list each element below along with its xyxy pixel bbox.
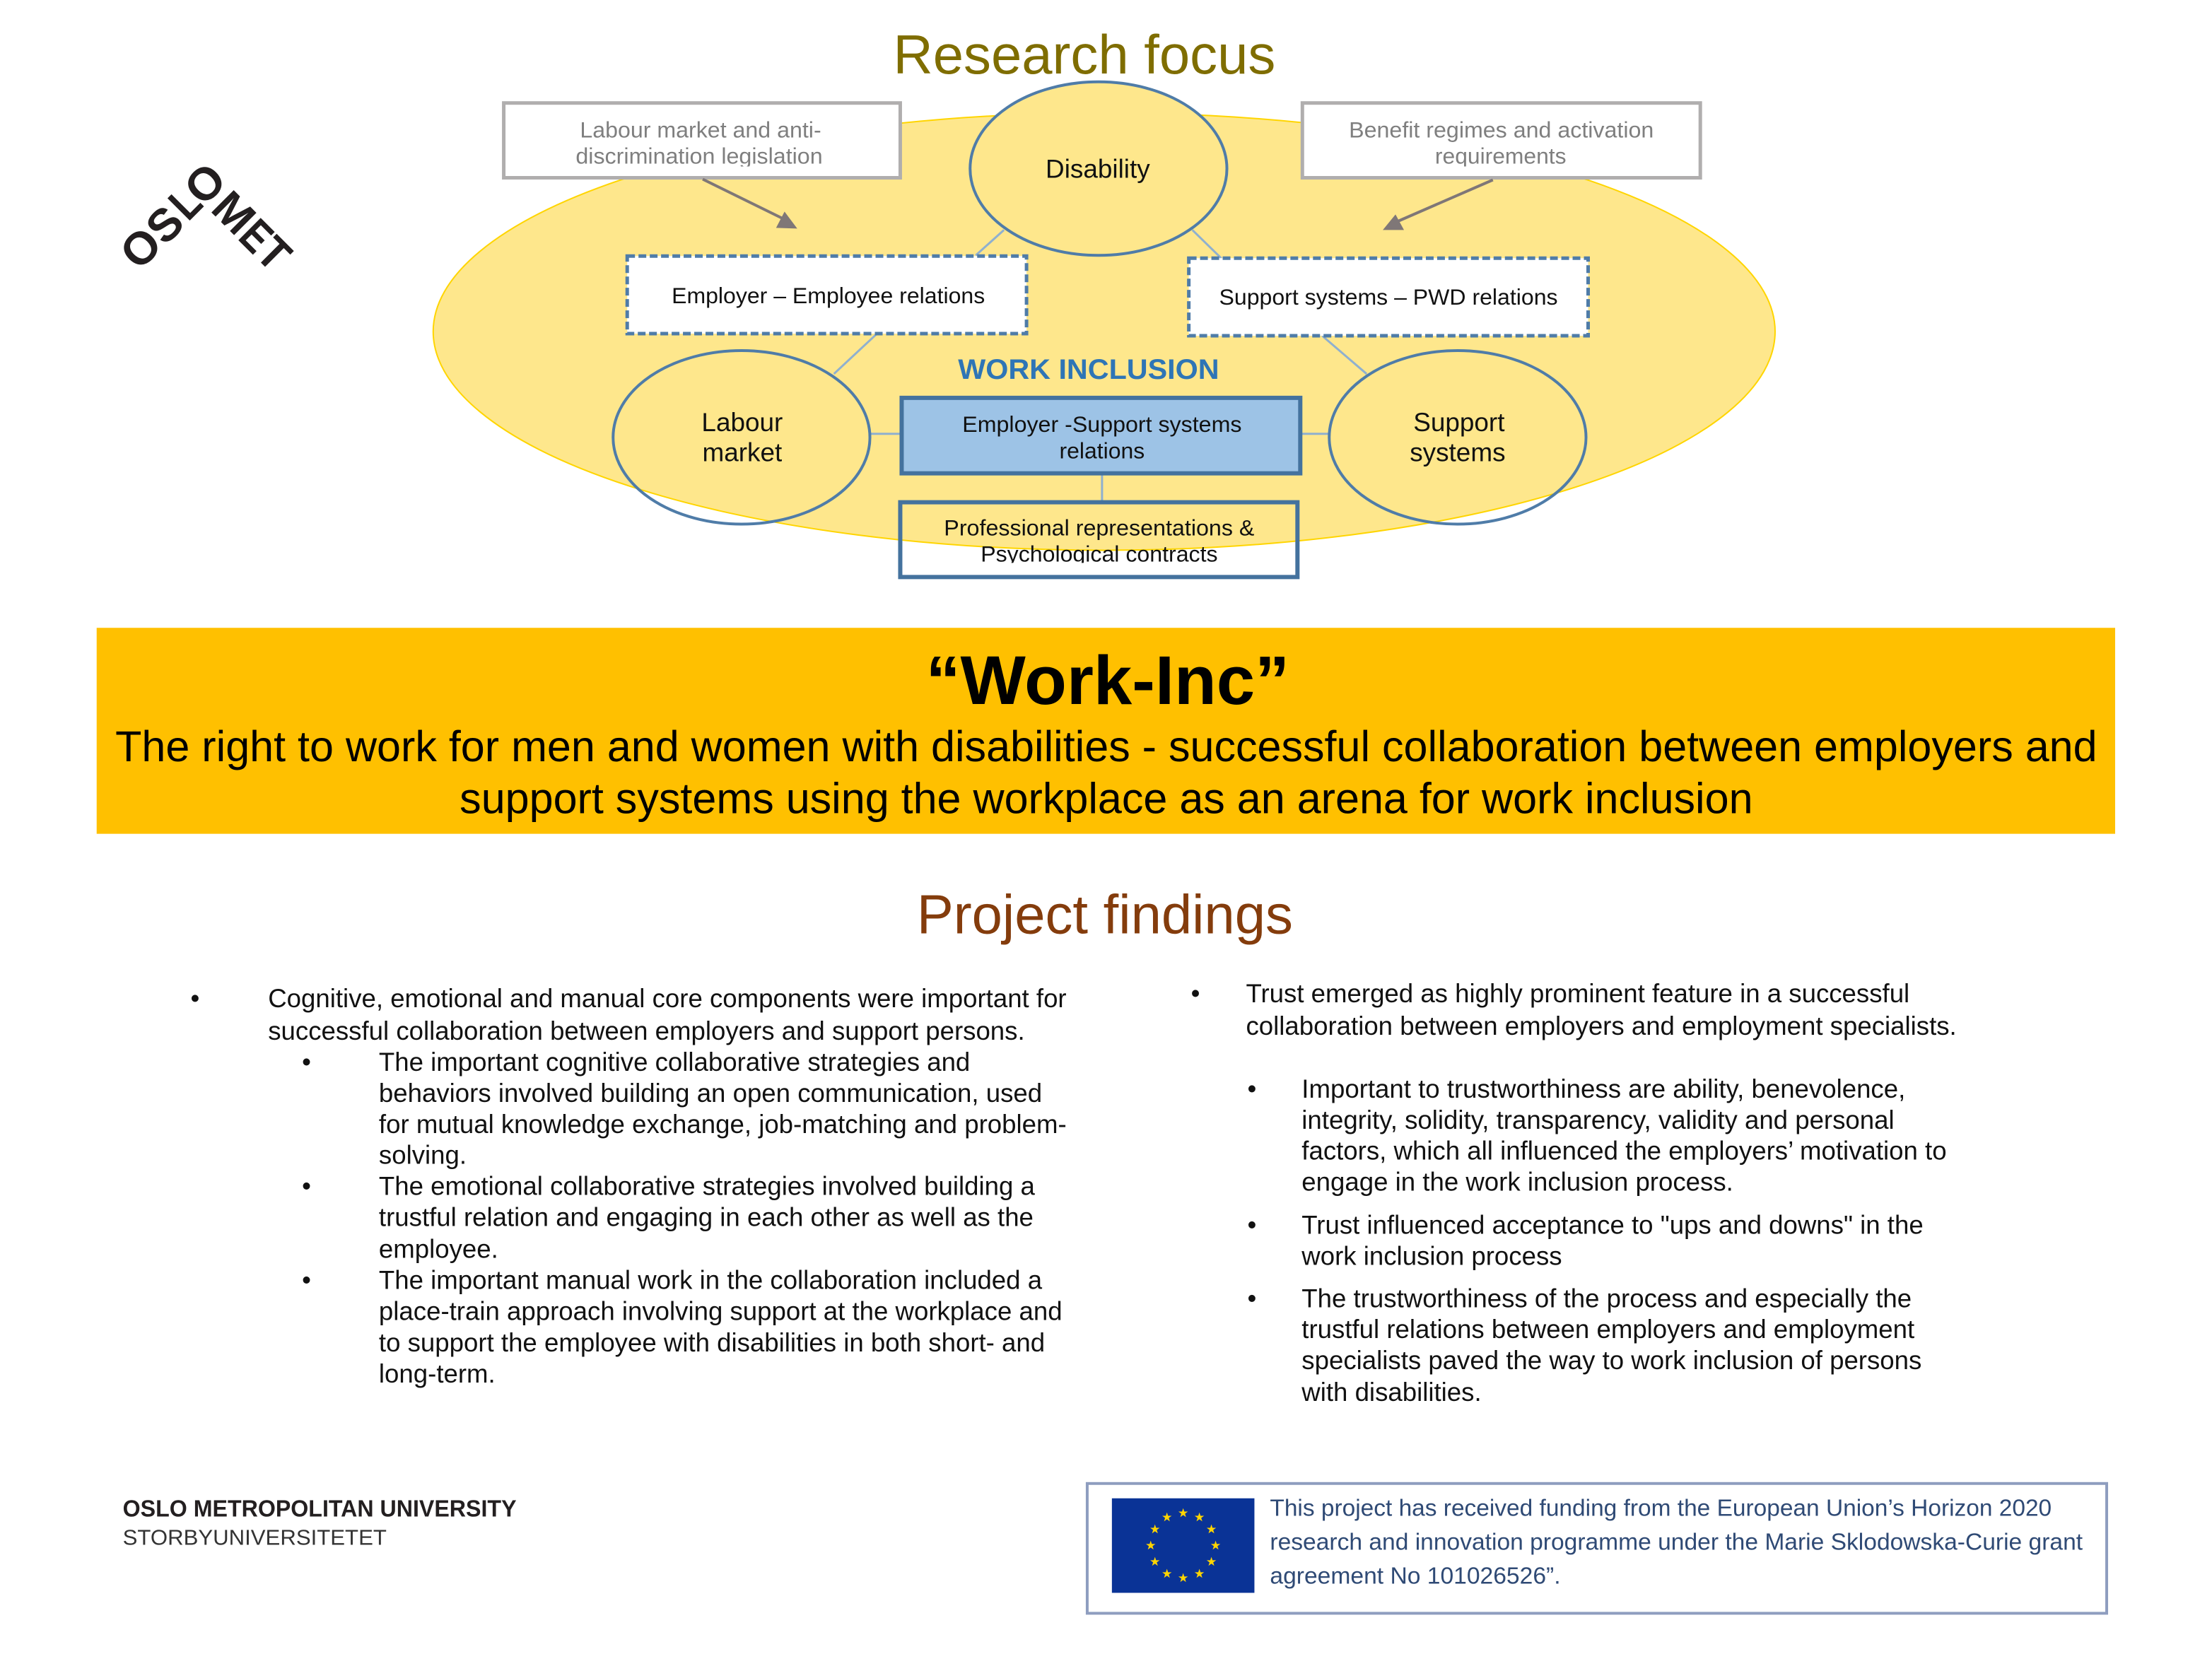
banner subtitle: support systems using the workplace as an arena for work inclusion [460, 775, 1753, 823]
text column: left findings: • [302, 1172, 311, 1201]
label: WORK INCLUSION: WORK INCLUSION [958, 354, 1219, 385]
text column: left findings [190, 984, 1067, 1388]
banner subtitle: The right to work for men and women with disabilities - successful collaboration between employers and [115, 722, 2097, 770]
text column: left findings: place-train approach involving support at the workplace and [379, 1296, 1063, 1325]
text column: left findings: The important manual work in the collaboration included a [379, 1265, 1043, 1294]
box: employer-support systems relations: Employer -Support systems [962, 411, 1241, 437]
text column: left findings: • [190, 984, 199, 1013]
text column: right findings: Trust emerged as highly prominent feature in a successful [1246, 979, 1909, 1008]
logo: OSLOMET: T [247, 227, 301, 281]
text column: right findings: factors, which all influenced the employers’ motivation to [1301, 1137, 1947, 1166]
box: professional representations: Professional representations & [944, 515, 1254, 540]
box: benefit regimes: requirements [1435, 143, 1567, 169]
text column: left findings: trustful relation and engaging in each other as well as the [379, 1203, 1034, 1232]
text column: left findings: solving. [379, 1141, 467, 1170]
box: employer-support systems relations: relations [1060, 438, 1145, 464]
text column: left findings: The important cognitive collaborative strategies and [379, 1048, 970, 1077]
circle: Support systems [1329, 351, 1586, 524]
text column: right findings: collaboration between employers and employment specialists. [1246, 1011, 1957, 1040]
circle: Disability: Disability [1046, 154, 1150, 183]
box: employer-employee relations: Employer – Employee relations [672, 283, 985, 308]
logo: OSLOMET: M [202, 181, 266, 245]
box: support systems-PWD relations [1189, 258, 1588, 336]
logo: OSLOMET [110, 153, 301, 281]
box: labour market legislation: discrimination legislation [575, 143, 823, 169]
circle: Labour market: market [702, 438, 782, 467]
logo: OSLOMET: L [159, 177, 212, 229]
banner subtitle [115, 722, 2097, 823]
logo: OSLOMET: O [110, 217, 172, 278]
box: labour market legislation: Labour market and anti- [580, 117, 821, 143]
circle: Disability [970, 82, 1227, 255]
background ellipse [433, 113, 1775, 550]
text column: left findings: employee. [379, 1234, 498, 1263]
text column: right findings: work inclusion process [1301, 1241, 1562, 1270]
text column: right findings: • [1247, 1074, 1256, 1103]
circle: Labour market: Labour [701, 408, 783, 437]
arrow: labour legislation to employer relations [703, 179, 797, 228]
box: support systems-PWD relations: Support systems – PWD relations [1219, 284, 1558, 310]
box: employer-employee relations [627, 256, 1026, 334]
text column: right findings: trustful relations between employers and employment [1301, 1315, 1914, 1344]
text column: left findings: • [302, 1265, 311, 1294]
logo: OSLOMET: O [174, 153, 235, 214]
text column: left findings: behaviors involved building an open communication, used [379, 1079, 1042, 1108]
text column: right findings: engage in the work inclusion process. [1301, 1168, 1733, 1197]
logo: OSLOMET: S [136, 196, 194, 254]
box: labour market legislation [504, 103, 900, 177]
text column: right findings: The trustworthiness of the process and especially the [1301, 1284, 1912, 1313]
text column: right findings: integrity, solidity, transparency, validity and personal [1301, 1105, 1895, 1134]
text column: right findings: • [1191, 979, 1200, 1008]
icon: EU flag [1112, 1498, 1254, 1592]
banner: Work-Inc title [97, 628, 2115, 834]
text column: left findings: for mutual knowledge exchange, job-matching and problem- [379, 1110, 1067, 1139]
funding text: agreement No 101026526”. [1270, 1563, 1561, 1589]
box: benefit regimes: Benefit regimes and activation [1349, 117, 1654, 143]
text column: right findings: • [1247, 1211, 1256, 1240]
box: benefit regimes [1302, 103, 1700, 177]
heading: Project findings: Project findings [917, 884, 1293, 945]
text column: left findings: The emotional collaborative strategies involved building a [379, 1172, 1036, 1201]
heading: Research focus: Research focus [894, 25, 1275, 86]
text column: right findings: specialists paved the way to work inclusion of persons [1301, 1346, 1921, 1375]
funding text: research and innovation programme under the Marie Sklodowska-Curie grant [1270, 1529, 2083, 1555]
text column: left findings: to support the employee with disabilities in both short- and [379, 1328, 1045, 1357]
text column: right findings: with disabilities. [1301, 1378, 1482, 1407]
banner title: “Work-Inc” [926, 641, 1289, 719]
box: professional representations: Psychological contracts [981, 541, 1218, 566]
box: professional representations [900, 503, 1297, 577]
text column: right findings: Important to trustworthiness are ability, benevolence, [1301, 1074, 1905, 1103]
funding text: This project has received funding from the European Union’s Horizon 2020 [1270, 1495, 2052, 1521]
text column: right findings [1191, 979, 1957, 1407]
circle: Labour market [613, 351, 870, 524]
text column: left findings: Cognitive, emotional and manual core components were important for [268, 984, 1067, 1013]
text column: left findings: • [302, 1048, 311, 1077]
connector lines [834, 230, 1367, 501]
text column: left findings: successful collaboration between employers and support persons. [268, 1016, 1025, 1045]
footer: university name: STORBYUNIVERSITETET [123, 1525, 387, 1550]
footer: university name [123, 1496, 517, 1550]
box: employer-support systems relations [901, 398, 1300, 474]
logo: OSLOMET: E [230, 210, 283, 263]
text column: left findings: long-term. [379, 1359, 496, 1388]
text column: right findings: • [1247, 1284, 1256, 1313]
circle: Support systems: systems [1410, 438, 1506, 467]
funding panel: EU Horizon 2020 [1087, 1484, 2107, 1613]
footer: university name: OSLO METROPOLITAN UNIVERSITY [123, 1496, 517, 1522]
arrow: benefit regimes to support relations [1383, 180, 1493, 230]
text column: right findings: Trust influenced acceptance to "ups and downs" in the [1301, 1211, 1924, 1240]
funding text [1270, 1495, 2083, 1589]
diagram: research focus model [433, 82, 1775, 577]
circle: Support systems: Support [1413, 408, 1504, 437]
